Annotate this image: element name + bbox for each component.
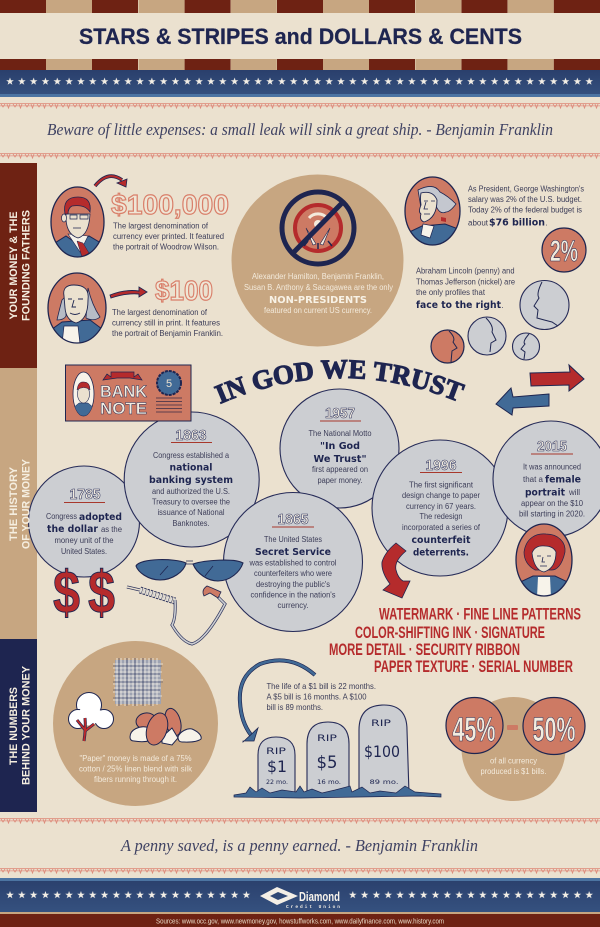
sidebar: history (0, 368, 37, 639)
arrow to $100,000 (95, 176, 127, 187)
central circle: non-presidents: Susan B. Anthony & Sacagawea are the only (244, 283, 393, 292)
circle: currency share: produced is $1 bills. (480, 767, 546, 776)
text: Washington salary: As President, George Washington's (468, 184, 584, 194)
circle: 1785 (28, 466, 140, 577)
banknote: 5 (166, 378, 172, 390)
tombstones (234, 705, 441, 798)
text: Washington salary: $76 billion (489, 218, 545, 228)
quote top: Beware of little expenses: a small leak will sink a great ship. - Benjamin Franklin (47, 120, 553, 139)
circle: paper money: "Paper" money is made of a 75% (80, 754, 192, 763)
text: Lincoln and Jefferson: . (502, 301, 504, 310)
portrait: woman (516, 524, 572, 597)
arrow blue left (496, 388, 549, 415)
header stripes top (0, 0, 600, 70)
value: 50%: 50% (532, 711, 576, 749)
circle: 1863: Treasury to oversee the (152, 498, 231, 506)
circle: 1957: first appeared on (312, 465, 368, 474)
icon: prohibited seal (282, 192, 354, 264)
circle: 2015 (493, 421, 600, 537)
circle: 1785: United States. (61, 547, 107, 556)
footer sources: Sources: www.occ.gov, www.newmoney.gov, howstuffworks.com, www.dailyfinance.com, www.history.com (156, 918, 444, 926)
circle: 1996: design change to paper (402, 491, 480, 500)
tombstones: $5 (316, 753, 338, 773)
text: bill life (266, 682, 376, 712)
circle: 1863 (124, 412, 259, 547)
circle: 1785: the dollar (47, 524, 98, 535)
circle: 1863: banking system (149, 475, 233, 486)
text: bill life: The life of a $1 bill is 22 months. (266, 682, 376, 691)
star band bottom (0, 878, 600, 914)
circle: 1957: 1957 (325, 405, 355, 422)
circle: 1785: adopted (79, 512, 122, 523)
portrait: Benjamin Franklin (48, 273, 106, 344)
sidebar: founding fathers: FOUNDING FATHERS (20, 210, 32, 321)
title: STARS & STRIPES and DOLLARS & CENTS (79, 24, 522, 49)
list: counterfeit deterrents (329, 604, 581, 676)
circle: 1865: confidence in the nation's (250, 590, 336, 600)
text: Washington salary: about (468, 218, 489, 228)
circle: 2015: It was announced (523, 462, 581, 472)
text: Wilson: currency ever printed. It featured (113, 232, 224, 241)
text: Franklin (112, 308, 223, 338)
text: Washington salary: salary was 2% of the U.S. budget. (468, 195, 582, 204)
coins: right-facing profiles (431, 280, 569, 363)
circle: 1863: 1863 (176, 427, 206, 444)
text: Lincoln and Jefferson: face to the right (416, 300, 501, 311)
text: bill life: A $5 bill is 16 months. A $100 (266, 692, 367, 702)
circle: 2015: bill starting in 2020. (519, 510, 585, 518)
central circle: non-presidents: Alexander Hamilton, Benjamin Franklin, (252, 272, 384, 281)
banknote (66, 365, 191, 421)
circle: 1996 (372, 440, 508, 576)
circle: paper money: fibers running through it. (94, 775, 177, 784)
icon: silk fibers (130, 707, 201, 748)
circle: currency share: of all currency (490, 756, 537, 766)
sidebar: founding fathers: YOUR MONEY & THE (8, 212, 20, 320)
value: $100,000: $100,000 (111, 189, 229, 220)
dollar signs: $ (88, 559, 115, 626)
icon: sunglasses (136, 560, 243, 581)
text: Franklin: the portrait of Benjamin Franklin. (112, 329, 223, 338)
text: Lincoln and Jefferson: the only profiles that (416, 288, 486, 297)
footer sources (0, 914, 600, 927)
circle: 1863: issuance of National (158, 508, 225, 517)
tombstones: RIP (266, 747, 287, 757)
tombstones: $100 (364, 742, 400, 761)
icon: linen (113, 658, 163, 706)
text: Washington salary: . (546, 218, 548, 228)
circle: 1863: Congress established a (153, 451, 229, 460)
circle: 1996: 1996 (426, 457, 456, 474)
text: Wilson: The largest denomination of (113, 222, 209, 230)
dollar signs: $ (53, 559, 80, 626)
text: Wilson: the portrait of Woodrow Wilson. (113, 242, 219, 252)
tombstones: $1 (267, 757, 287, 776)
circle: 1865: Secret Service (255, 547, 331, 558)
circle: 1957: The National Motto (308, 429, 372, 438)
coin: 2%: 2% (550, 235, 578, 268)
central circle: non-presidents: featured on current US currency. (264, 306, 372, 315)
tombstones: RIP (371, 719, 392, 729)
tombstones: 22 mo. (266, 778, 288, 786)
tombstones: 16 mo. (317, 778, 341, 786)
logo: Diamond Credit Union: Diamond (299, 889, 340, 904)
circle: 1957: We Trust" (314, 454, 367, 465)
icon: earpiece (127, 586, 225, 644)
sidebar labels history: THE HISTORY (8, 466, 20, 541)
circle: 1996: incorporated a series of (402, 523, 481, 532)
circle: 1865 (224, 492, 362, 632)
text: Wilson (113, 222, 224, 252)
sidebar: founding fathers (0, 163, 37, 368)
icon: cotton (68, 692, 114, 741)
sidebar: numbers (0, 639, 37, 812)
value: $100: $100 (155, 275, 213, 306)
coin: 2% (542, 228, 586, 272)
tombstones: 89 mo. (370, 778, 398, 786)
arrow red curved (382, 543, 410, 598)
circle: paper money: cotton / 25% linen blend with silk (79, 764, 193, 774)
arrow blue curved (240, 660, 315, 742)
circle: 1865: destroying the public's (256, 580, 330, 589)
circle: 2015: that a (523, 475, 544, 484)
arrow to $100 (110, 287, 147, 298)
circle: 2015: appear on the $10 (521, 499, 584, 508)
sidebar: numbers: THE NUMBERS (8, 687, 20, 765)
text: Franklin: The largest denomination of (112, 308, 208, 317)
dash (507, 725, 518, 730)
logo: Diamond Credit Union: Credit Union (286, 904, 340, 910)
star band top (0, 70, 600, 97)
arrow red right (530, 365, 584, 391)
circle: 1865: 1865 (278, 511, 308, 528)
text: Lincoln and Jefferson (416, 266, 516, 311)
circle: 2015: 2015 (537, 438, 567, 455)
circle: 1957: "In God (320, 441, 360, 452)
circle: 1865: was established to control (249, 558, 337, 568)
circle: 1996: The first significant (409, 480, 474, 490)
text: Washington salary: Today 2% of the federal budget is (468, 206, 582, 214)
circle: 2015: portrait (525, 488, 565, 498)
circle: currency share (446, 697, 585, 801)
circle: 1996: The redesign (420, 512, 462, 521)
value: 45%: 45% (452, 711, 496, 749)
circle: 1785: as the (101, 525, 123, 534)
dollar signs (53, 559, 115, 626)
circle: 1996: counterfeit (412, 535, 471, 546)
circle: 1865: currency. (278, 601, 308, 610)
heading: in god we trust: IN GOD WE TRUST (213, 360, 466, 404)
text: Lincoln and Jefferson: Thomas Jefferson (nickel) are (416, 278, 516, 286)
circle: 2015: female (545, 474, 581, 486)
text: Franklin: currency still in print. It features (112, 318, 220, 328)
circle: 1865: The United States (264, 535, 322, 544)
circle: 1863: and authorized the U.S. (152, 487, 230, 496)
banknote: BANK (100, 382, 148, 401)
logo: Diamond Credit Union (260, 887, 340, 910)
circle: 1863: Banknotes. (172, 519, 210, 528)
circle: 2015: will (568, 488, 580, 497)
circle: 1957 (280, 389, 399, 508)
circle: 1863: national (170, 462, 212, 474)
circle: 1785: Congress (46, 512, 77, 521)
portrait: George Washington (405, 177, 461, 246)
central circle: non-presidents: NON-PRESIDENTS (269, 295, 367, 306)
circle: 1996: currency in 67 years. (406, 502, 476, 511)
sidebar: numbers: BEHIND YOUR MONEY (20, 665, 32, 785)
circle: 1785: 1785 (70, 486, 100, 503)
banknote: NOTE (100, 399, 147, 418)
tombstones: RIP (317, 734, 338, 744)
circle: 1996: deterrents. (413, 548, 469, 558)
quote bottom: A penny saved, is a penny earned. - Benjamin Franklin (120, 836, 478, 855)
circle: 1865: counterfeiters who were (254, 569, 332, 578)
circle: paper money (53, 641, 218, 806)
sidebar labels history (8, 458, 32, 549)
sidebar labels history: OF YOUR MONEY (20, 458, 32, 549)
decorative border bottom (0, 817, 600, 874)
text: Washington salary (468, 184, 584, 228)
portrait: Woodrow Wilson (50, 187, 106, 258)
text: bill life: bill is 89 months. (266, 703, 323, 712)
decorative border (0, 102, 600, 159)
central circle: non-presidents (232, 174, 404, 346)
text: Lincoln and Jefferson: Abraham Lincoln (penny) and (416, 266, 514, 276)
circle: 1785: money unit of the (54, 536, 114, 545)
circle: 1957: paper money. (318, 476, 362, 485)
